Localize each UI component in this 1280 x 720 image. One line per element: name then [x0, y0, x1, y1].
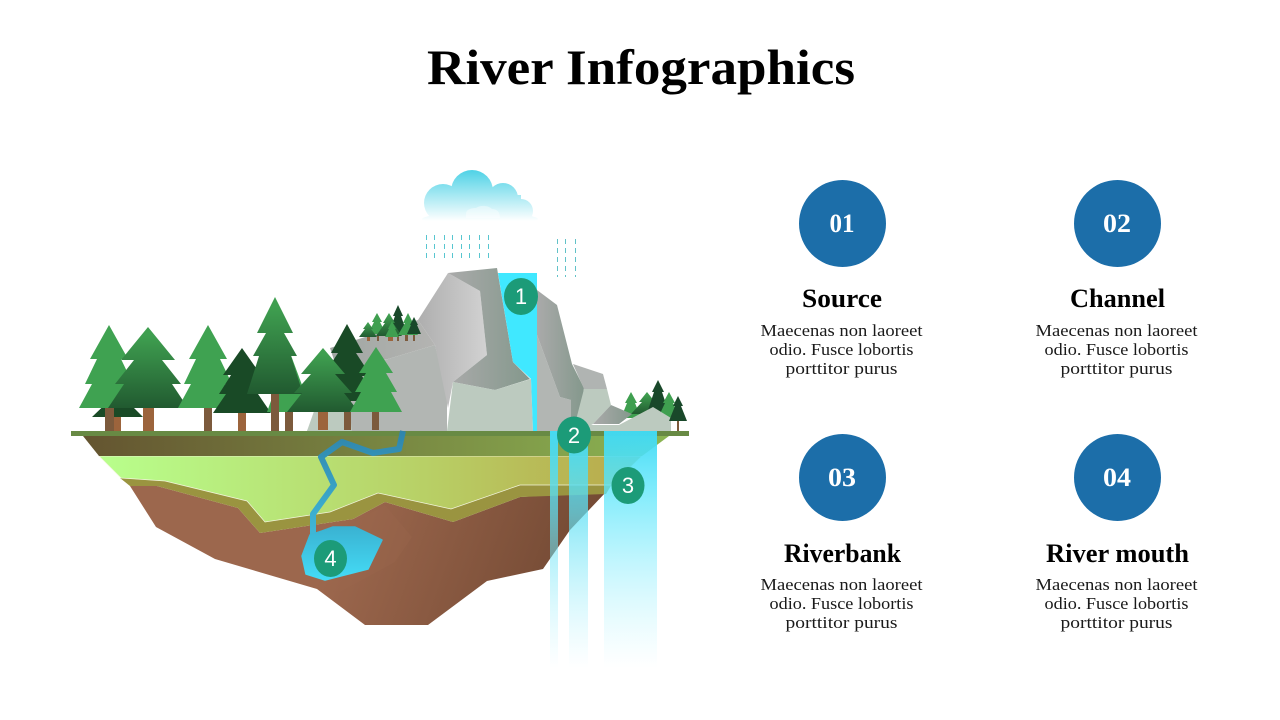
waterfall 1 [498, 273, 537, 431]
small trees on the mountain [359, 305, 421, 341]
body text: Maecenas non laoreet [1036, 321, 1198, 340]
rock: central dark face [448, 268, 530, 390]
tree: light, front of mountain [350, 347, 402, 430]
badge 04 [1074, 434, 1161, 521]
lake [302, 527, 382, 580]
marker 3 [612, 467, 644, 504]
marker 4 [314, 540, 347, 577]
tree: dark, centre [213, 348, 271, 431]
clay layer [120, 478, 612, 533]
river [313, 431, 403, 536]
tree: tall gradient [247, 297, 303, 431]
island cross-section [71, 431, 689, 625]
badge 01 [799, 180, 886, 267]
marker 4: 4 [324, 546, 337, 571]
earth layer [130, 486, 606, 625]
tree: dark, right [317, 324, 377, 430]
body text: odio. Fusce lobortis [1044, 340, 1188, 359]
tree: gradient, right [287, 348, 359, 430]
item 04: River mouth [1036, 434, 1198, 632]
small trees on the right [621, 380, 680, 418]
body text: odio. Fusce lobortis [1044, 594, 1188, 613]
cloud [422, 170, 538, 225]
tree: dark, back left [92, 392, 143, 431]
topsoil layer [83, 436, 669, 456]
body text: odio. Fusce lobortis [770, 340, 914, 359]
tree: gradient, left [108, 327, 188, 431]
badge 01: 01 [830, 209, 854, 238]
rock: central light face [418, 273, 487, 408]
body text: porttitor purus [786, 613, 898, 632]
grass layer [99, 456, 642, 522]
badge 03: 03 [828, 463, 856, 492]
waterfall 3 [604, 431, 657, 668]
marker 1: 1 [515, 284, 527, 309]
item 02: Channel [1036, 180, 1198, 378]
badge 02: 02 [1103, 209, 1131, 238]
rock: central pale base [447, 379, 533, 431]
badge 02 [1074, 180, 1161, 267]
heading: Riverbank: Riverbank [784, 539, 902, 568]
rock: upper left cap [330, 320, 435, 368]
waterfall 2 [550, 431, 588, 668]
tree: light, far left [79, 325, 139, 431]
body text: Maecenas non laoreet [760, 321, 923, 340]
rain left [426, 235, 488, 262]
body text: odio. Fusce lobortis [770, 594, 914, 613]
rock: right ridge [537, 335, 571, 431]
marker 2 [557, 416, 591, 454]
body text: porttitor purus [786, 359, 898, 378]
tree: light, centre left [178, 325, 238, 431]
rain right [558, 239, 576, 277]
mountain rocks [307, 268, 611, 431]
rock: lower left [307, 345, 447, 431]
marker 3: 3 [622, 473, 634, 498]
heading: Source: Source [802, 284, 882, 313]
body text: porttitor purus [1060, 613, 1172, 632]
illustration: floating island with river [71, 170, 689, 668]
marker 1 [504, 278, 538, 315]
ground strip [71, 431, 689, 436]
body text: Maecenas non laoreet [1036, 575, 1198, 594]
badge 03 [799, 434, 886, 521]
heading: Channel: Channel [1070, 284, 1165, 313]
rock: small right rocks [585, 396, 687, 431]
marker 2: 2 [568, 423, 580, 448]
forest [79, 297, 402, 431]
title: River Infographics [427, 39, 855, 95]
heading: River mouth: River mouth [1046, 539, 1190, 568]
item 01: Source [760, 180, 923, 378]
body text: Maecenas non laoreet [760, 575, 923, 594]
item 03: Riverbank [760, 434, 923, 632]
tree: light, behind tall tree [267, 350, 312, 431]
badge 04: 04 [1103, 463, 1131, 492]
body text: porttitor purus [1060, 359, 1172, 378]
